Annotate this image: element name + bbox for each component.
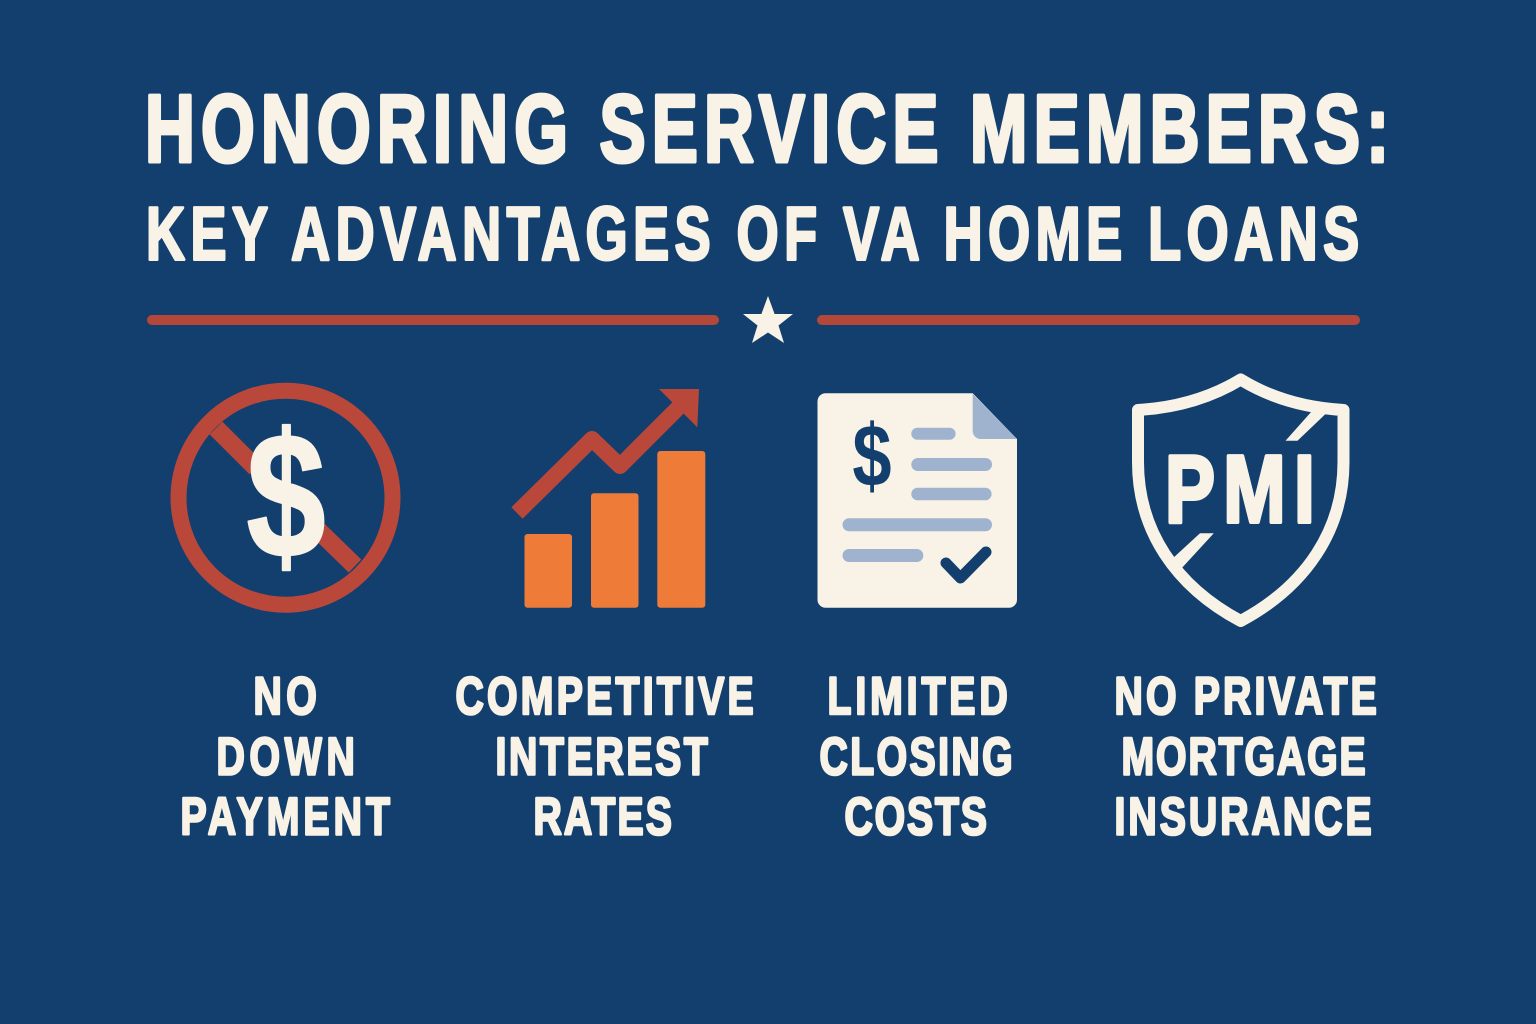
divider with star: [147, 296, 1360, 343]
label: no down payment: NO: [254, 666, 317, 726]
label: no private mortgage insurance: INSURANCE: [1114, 787, 1372, 846]
icon: closing cost document: [818, 393, 1017, 608]
label: no down payment: DOWN: [216, 727, 355, 786]
label: competitive interest rates: INTEREST: [496, 727, 708, 786]
label: no private mortgage insurance: MORTGAGE: [1122, 727, 1366, 786]
title: HONORING SERVICE MEMBERS:: [145, 74, 1389, 182]
icon: no down payment, crossed-out dollar: [178, 391, 392, 605]
title: [145, 74, 1389, 276]
label: limited closing costs: LIMITED: [828, 666, 1008, 726]
icon: PMI shield: PMI: [1165, 436, 1315, 543]
icon: rising bar chart with arrow: [517, 389, 705, 608]
label: limited closing costs: CLOSING: [820, 727, 1013, 786]
label: no down payment: [180, 666, 390, 846]
label: limited closing costs: COSTS: [844, 787, 987, 846]
title: KEY ADVANTAGES OF VA HOME LOANS: [146, 192, 1359, 276]
label: no private mortgage insurance: NO PRIVATE: [1114, 666, 1377, 726]
label: competitive interest rates: [456, 666, 754, 846]
label: competitive interest rates: COMPETITIVE: [456, 666, 754, 726]
label: competitive interest rates: RATES: [534, 787, 672, 846]
label: no down payment: PAYMENT: [180, 787, 390, 846]
label: limited closing costs: [820, 666, 1013, 846]
label: no private mortgage insurance: [1114, 666, 1377, 846]
icon: closing cost document: $: [852, 406, 892, 505]
icon: no down payment, crossed-out dollar: $: [246, 397, 326, 596]
icon: PMI shield: [1138, 380, 1344, 621]
